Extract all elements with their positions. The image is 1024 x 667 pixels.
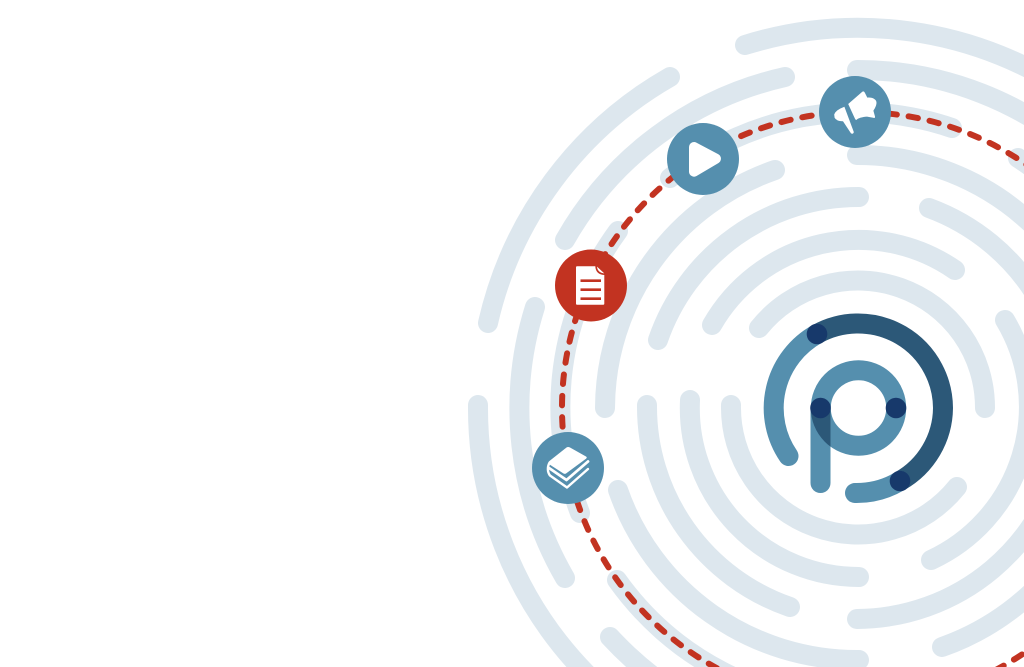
logo: letter p	[774, 323, 943, 493]
logo stem	[810, 408, 830, 483]
concentric fingerprint rings	[478, 28, 1024, 667]
logo outer ring tail	[855, 481, 900, 493]
icon: books	[532, 432, 604, 504]
logo inner ring	[821, 370, 896, 446]
icon: megaphone	[819, 76, 891, 148]
logo node dots	[807, 324, 910, 491]
icon: play	[667, 123, 739, 195]
logo outer ring left	[774, 334, 817, 456]
logo outer ring dark	[817, 323, 943, 481]
icon: document	[555, 250, 627, 322]
infographic artwork	[468, 18, 1024, 667]
logo overlap	[811, 410, 830, 446]
red dashed orbit	[562, 112, 1024, 667]
